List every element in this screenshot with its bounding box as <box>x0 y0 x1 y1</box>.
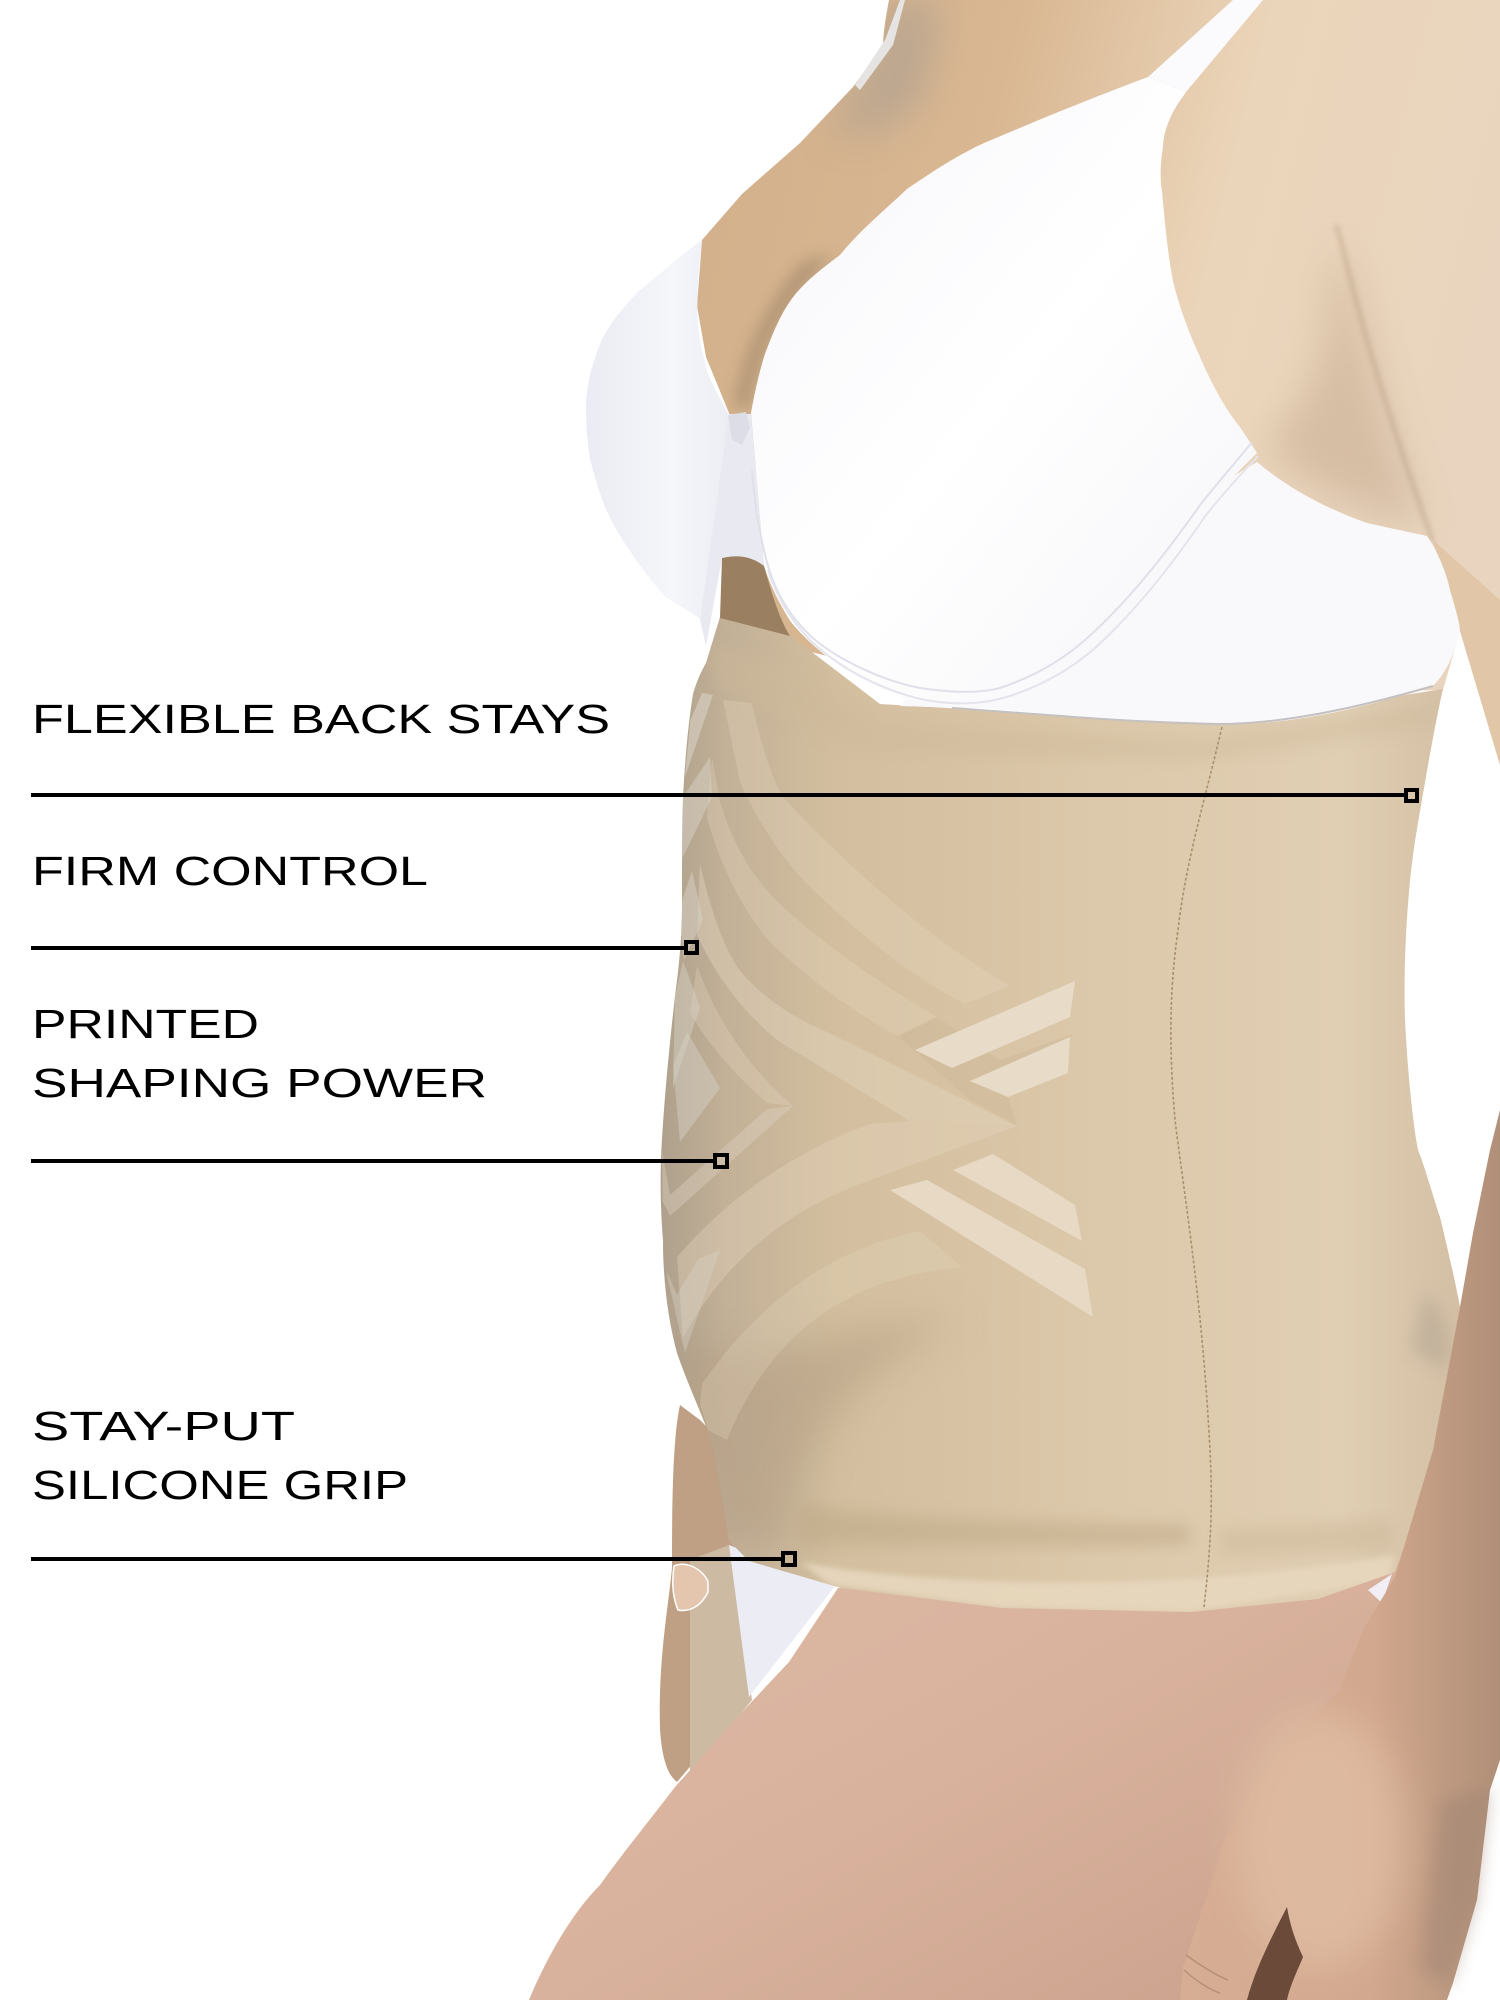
label: STAY-PUT <box>32 1403 295 1449</box>
white underwear <box>729 1545 835 1697</box>
fingernail <box>673 1564 708 1610</box>
band and back wing <box>900 462 1460 724</box>
white underwear sliver right <box>1368 1574 1392 1603</box>
darker strip through the X <box>898 1017 1075 1126</box>
label: PRINTED <box>32 1001 259 1047</box>
cleavage crease shadow <box>735 255 835 410</box>
left hand behind hip <box>660 1405 760 1782</box>
hip shadow <box>694 1322 917 1542</box>
arm crease <box>1336 225 1433 542</box>
right cup <box>751 77 1257 706</box>
underwire channel <box>752 442 1252 692</box>
marker <box>715 1155 727 1167</box>
shadow under bust <box>1200 713 1438 752</box>
right forearm and hand <box>1180 1110 1500 2000</box>
garment: waist shaper <box>660 617 1460 1612</box>
label: FLEXIBLE BACK STAYS <box>32 696 610 742</box>
leader line <box>31 1159 715 1163</box>
lower arm of central X <box>677 1121 1017 1338</box>
bridge knot <box>728 412 750 445</box>
white bra <box>586 0 1460 724</box>
leader line <box>31 1557 783 1561</box>
neck shadow <box>830 0 940 134</box>
second curved band <box>707 757 937 1036</box>
hem wrinkle shading right <box>1224 1523 1388 1553</box>
marker <box>1406 790 1417 801</box>
upper body skin and arm <box>697 0 1500 765</box>
knuckle shadow <box>1420 1790 1490 1985</box>
finger crease <box>1184 1955 1228 1993</box>
band D <box>690 966 793 1106</box>
printed shaping panel <box>660 693 1093 1440</box>
left zigzags <box>685 693 713 777</box>
bridge <box>700 414 764 646</box>
left cup <box>586 240 729 620</box>
hem wrinkle shading <box>800 1505 1190 1545</box>
band lower edge <box>952 686 1433 724</box>
marker <box>783 1553 795 1565</box>
label line two: SHAPING POWER <box>32 1060 487 1106</box>
gore gap showing brown under the bridge <box>720 556 790 636</box>
callout: firm control <box>31 848 697 953</box>
callout: stay-put silicone grip <box>31 1403 795 1565</box>
callout: printed shaping power <box>31 1001 727 1167</box>
callout: flexible back stays <box>31 696 1417 801</box>
side seam <box>1171 727 1222 1607</box>
lower curved band <box>700 1256 858 1440</box>
leader line <box>31 946 686 950</box>
label: FIRM CONTROL <box>32 848 428 894</box>
armpit shadow <box>1265 240 1425 530</box>
lower arm shade <box>1433 540 1500 765</box>
gap between fingers <box>1247 1907 1303 2000</box>
thigh <box>529 1500 1440 2000</box>
label line two: SILICONE GRIP <box>32 1462 408 1508</box>
marker <box>686 942 697 953</box>
back strap <box>1148 0 1263 92</box>
hand highlight <box>1235 1710 1405 1970</box>
wings <box>915 981 1075 1068</box>
back shade <box>1410 1298 1450 1366</box>
upper curved band <box>723 700 954 988</box>
front strap <box>855 0 905 90</box>
hem light strip <box>800 1555 1395 1612</box>
upper arm of central X <box>697 864 1017 1126</box>
leader line <box>31 793 1406 797</box>
